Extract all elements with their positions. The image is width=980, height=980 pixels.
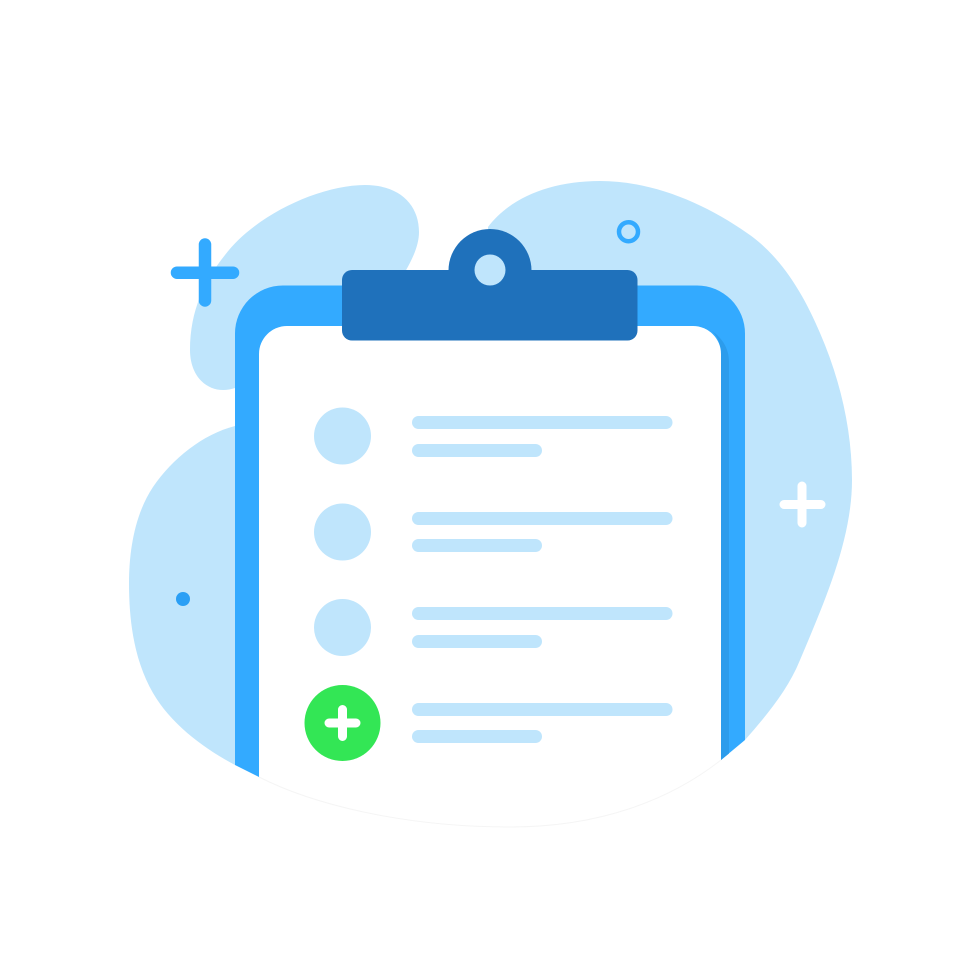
clip bar: [342, 270, 638, 340]
board frame: [235, 286, 745, 777]
list row 2: [314, 504, 672, 560]
list row 3: [314, 599, 672, 656]
paper bottom edge: [259, 760, 721, 827]
background blobs: [129, 181, 852, 765]
list row 4 with green plus: [304, 685, 672, 761]
clip ring: [448, 229, 532, 312]
clip hole: [474, 254, 506, 286]
frame inner shadow: [712, 331, 729, 760]
icon: dot: [176, 592, 190, 606]
icon: ring: [619, 222, 638, 241]
clipboard board: [235, 286, 745, 827]
paper sheet: [259, 326, 721, 827]
list row 1: [314, 408, 672, 464]
icon: blue plus: [177, 244, 233, 300]
clip: [342, 229, 638, 340]
icon: white plus: [784, 486, 821, 523]
